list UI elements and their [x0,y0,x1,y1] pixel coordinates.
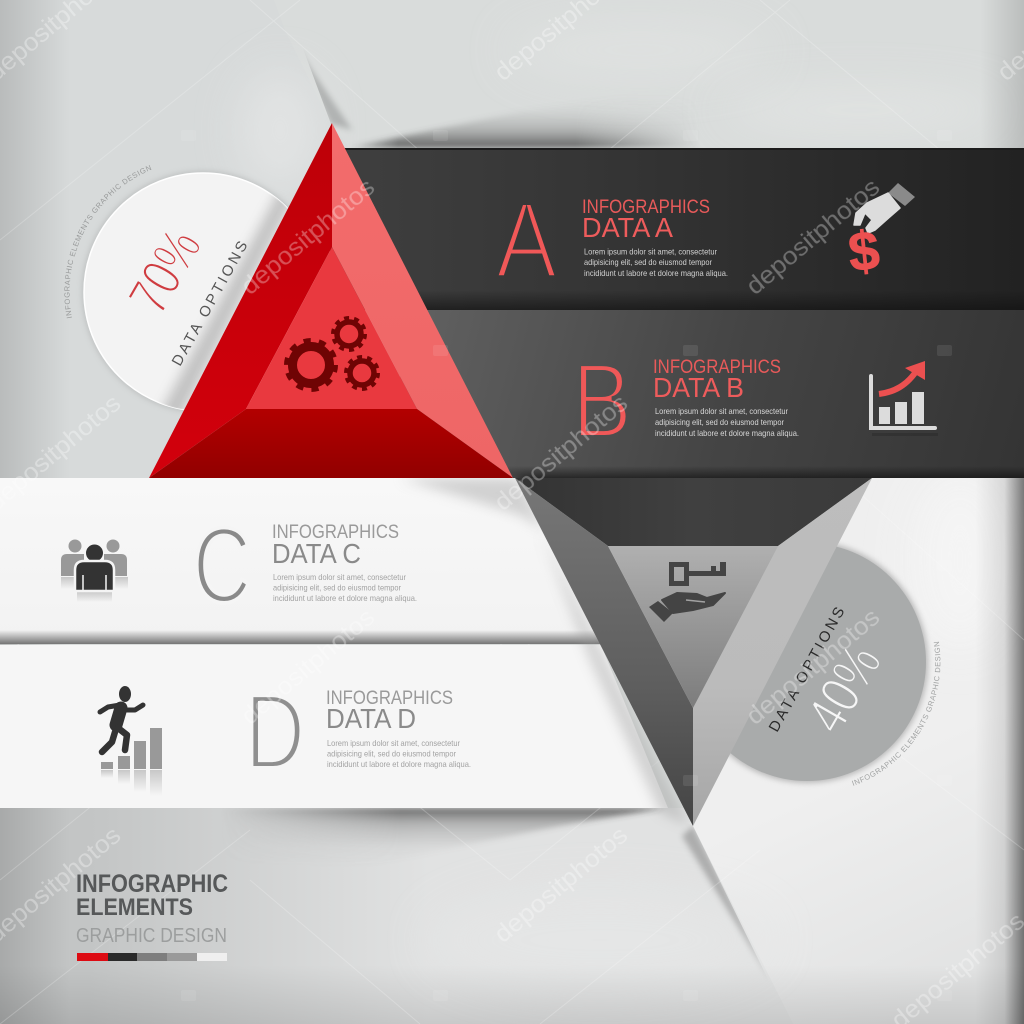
watermark: depositphotos [741,603,885,731]
watermark: depositphotos [236,173,380,301]
body text D: Lorem ipsum dolor sit amet, consectetur [327,738,460,748]
title line 1: INFOGRAPHIC [76,870,228,898]
title line 2: ELEMENTS [76,894,193,921]
watermark: depositphotos [741,173,885,301]
panel: data C band [0,478,600,644]
arc caption 70: INFOGRAPHIC ELEMENTS GRAPHIC DESIGN [64,165,152,318]
circle: 70% data option [64,165,320,412]
body text B: Lorem ipsum dolor sit amet, consectetur [655,406,788,416]
letter D: D [245,673,305,791]
value: 70%: 70% [116,218,213,324]
body text C: incididunt ut labore et dolore magna aliqua. [273,593,417,603]
heading D: INFOGRAPHICS [326,688,453,709]
watermark: depositphotos [489,389,633,517]
panel: data B band [400,310,1024,478]
icon: growth chart [871,361,938,436]
colour legend bar [77,953,227,961]
body text A: adipisicing elit, sed do eiusmod tempor [584,257,712,267]
body text A [584,246,728,278]
body text D: incididunt ut labore et dolore magna aliqua. [327,759,471,769]
circle: 40% data option [696,542,940,786]
subtitle: GRAPHIC DESIGN [76,925,227,947]
panel: data D band [0,645,668,808]
body text C: Lorem ipsum dolor sit amet, consectetur [273,572,406,582]
icon: hand with dollar [845,183,915,283]
heading C: INFOGRAPHICS [272,522,399,543]
heading B: INFOGRAPHICS [653,357,781,378]
letter C: C [193,505,251,625]
body text B: adipisicing elit, sed do eiusmod tempor [655,417,784,427]
body text A: Lorem ipsum dolor sit amet, consectetur [584,246,717,256]
body text B: incididunt ut labore et dolore magna aliqua. [655,428,799,438]
fold shadows [236,59,762,968]
icon: runner on bars [100,686,162,796]
watermark: depositphotos [489,821,633,949]
label: data options 70: DATA OPTIONS [169,238,251,369]
icon: hand holding key [649,562,726,622]
shadow beside dark triangle [540,530,690,826]
body text A: incididunt ut labore et dolore magna aliqua. [584,268,728,278]
arc caption 40: INFOGRAPHIC ELEMENTS GRAPHIC DESIGN [852,642,940,786]
letter A: A [496,179,557,300]
body text C: adipisicing elit, sed do eiusmod tempor [273,582,401,592]
value: 40%: 40% [794,634,893,743]
body text D: adipisicing elit, sed do eiusmod tempor [327,748,456,758]
heading A: INFOGRAPHICS [582,197,710,218]
body text B [655,406,799,438]
subheading D: DATA D [326,703,416,734]
body text D [327,738,471,769]
watermark camera marks [181,130,952,1001]
icon: hand with dollar: $ [845,219,882,283]
subheading B: DATA B [653,372,744,403]
triangle: red [149,123,513,478]
subheading A: DATA A [582,212,673,243]
body text C [273,572,417,603]
icon: people group [61,540,128,602]
letter B: B [572,342,632,460]
triangle: dark inverted [515,478,872,826]
label: data options 40: DATA OPTIONS [766,604,848,735]
title block [76,870,228,961]
watermark: depositphotos [236,603,380,731]
panel: data A band [330,148,1024,310]
subheading C: DATA C [272,538,361,569]
icon: gears [286,318,378,390]
